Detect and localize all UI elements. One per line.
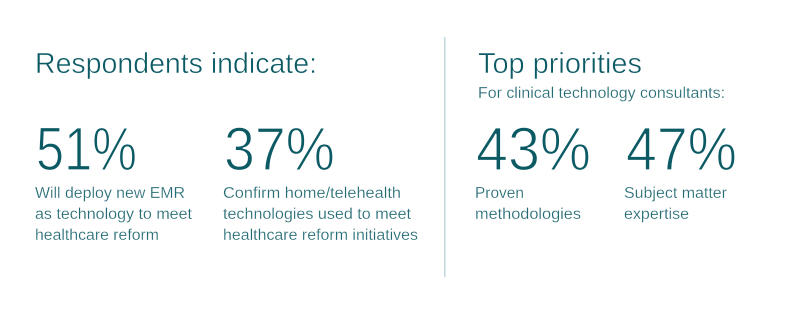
description: new EMR <box>35 185 193 244</box>
stat: 47 percent <box>624 115 737 223</box>
heading: respondents indicate: Respondents indicate: <box>35 48 317 80</box>
description: new EMR: as technology to meet <box>35 206 193 223</box>
description: subject matter expertise <box>624 185 727 223</box>
description: home/telehealth: technologies used to meet <box>223 206 412 223</box>
stat: 43 percent <box>475 115 591 223</box>
panel: top priorities <box>475 48 737 223</box>
description: proven methodologies: Proven <box>475 185 524 202</box>
stat: 37 percent <box>223 115 418 244</box>
number: 37%: 37% <box>224 115 335 183</box>
description: new EMR: Will deploy new EMR <box>35 185 185 202</box>
description: proven methodologies: methodologies <box>475 206 581 223</box>
divider <box>444 37 446 277</box>
description: new EMR: healthcare reform <box>35 227 159 244</box>
stat: 51 percent <box>35 115 193 244</box>
description: home/telehealth <box>223 185 418 244</box>
number: 51%: 51% <box>36 115 137 183</box>
heading: top priorities: Top priorities <box>478 48 642 80</box>
number: 43%: 43% <box>476 115 591 183</box>
description: proven methodologies <box>475 185 581 223</box>
description: home/telehealth: healthcare reform initiatives <box>223 227 418 244</box>
number: 47%: 47% <box>626 115 737 183</box>
subheading: clinical technology consultants: For clinical technology consultants: <box>478 85 725 102</box>
description: subject matter expertise: expertise <box>624 206 689 223</box>
description: subject matter expertise: Subject matter <box>624 185 727 202</box>
panel: respondents indicate <box>35 48 418 244</box>
description: home/telehealth: Confirm home/telehealth <box>223 185 401 202</box>
